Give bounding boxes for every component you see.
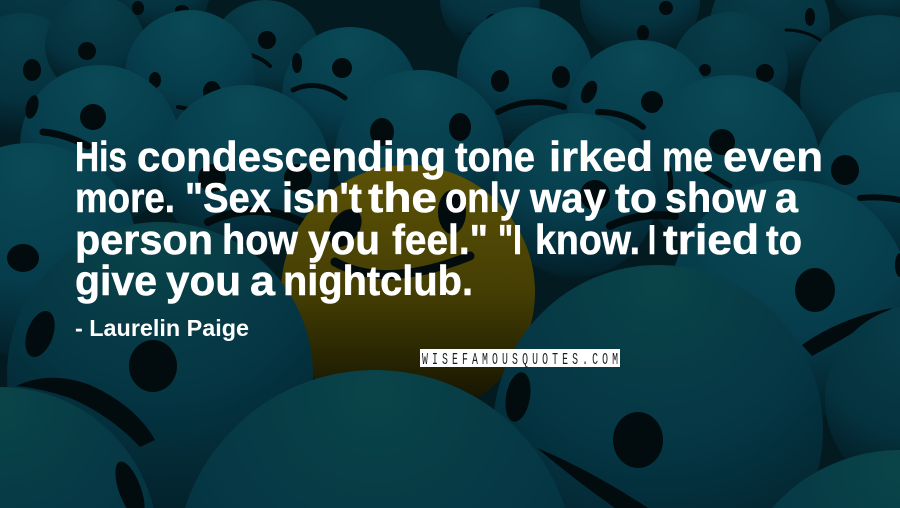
author attribution: - Laurelin Paige <box>75 315 249 341</box>
quote line 3: know. <box>535 216 640 263</box>
quote line 1: condescending <box>137 133 446 180</box>
watermark badge: WISEFAMOUSQUOTES.COM <box>422 351 618 370</box>
yellow face <box>281 165 535 419</box>
quote line 3: tried <box>663 216 759 263</box>
right ball <box>670 180 900 495</box>
quote line 3 <box>75 216 802 263</box>
quote line 2: "Sex <box>185 174 272 221</box>
quote line 2: only <box>445 174 521 221</box>
quote line 1: irked <box>549 133 653 180</box>
quote line 3: "I <box>498 216 522 263</box>
quote line 3: you <box>308 216 380 263</box>
quote line 1: me <box>662 133 713 180</box>
quote line 2: show <box>665 174 766 221</box>
quote line 2: more. <box>75 174 175 221</box>
quote line 4: give <box>75 257 157 304</box>
quote line 3: feel." <box>392 216 488 263</box>
third row balls <box>20 40 900 277</box>
large left ball <box>7 222 313 508</box>
second row balls <box>0 0 900 175</box>
quote line 4: you <box>166 257 241 304</box>
quote line 2: to <box>615 174 657 221</box>
far row balls <box>0 0 900 85</box>
quote line 1: tone <box>455 133 535 180</box>
quote line 1: His <box>75 133 127 180</box>
quote line 1 <box>75 133 823 180</box>
quote line 2 <box>75 174 799 221</box>
quote line 4 <box>75 257 473 304</box>
quote line 1: even <box>723 133 823 180</box>
large bottom-right ball <box>493 265 823 508</box>
quote line 3: how <box>222 216 298 263</box>
quote text <box>75 133 823 304</box>
quote line 2: isn't <box>282 174 362 221</box>
quote line 2: a <box>775 174 799 221</box>
quote line 2: way <box>529 174 607 221</box>
quote line 4: a <box>250 257 276 304</box>
quote line 3: I <box>648 216 656 263</box>
quote line 3: person <box>75 216 213 263</box>
quote line 2: the <box>368 174 437 221</box>
ball behind the yellow face <box>0 85 330 357</box>
quote line 3: to <box>766 216 802 263</box>
quote line 4: nightclub. <box>283 257 473 304</box>
foreground balls <box>0 370 900 508</box>
